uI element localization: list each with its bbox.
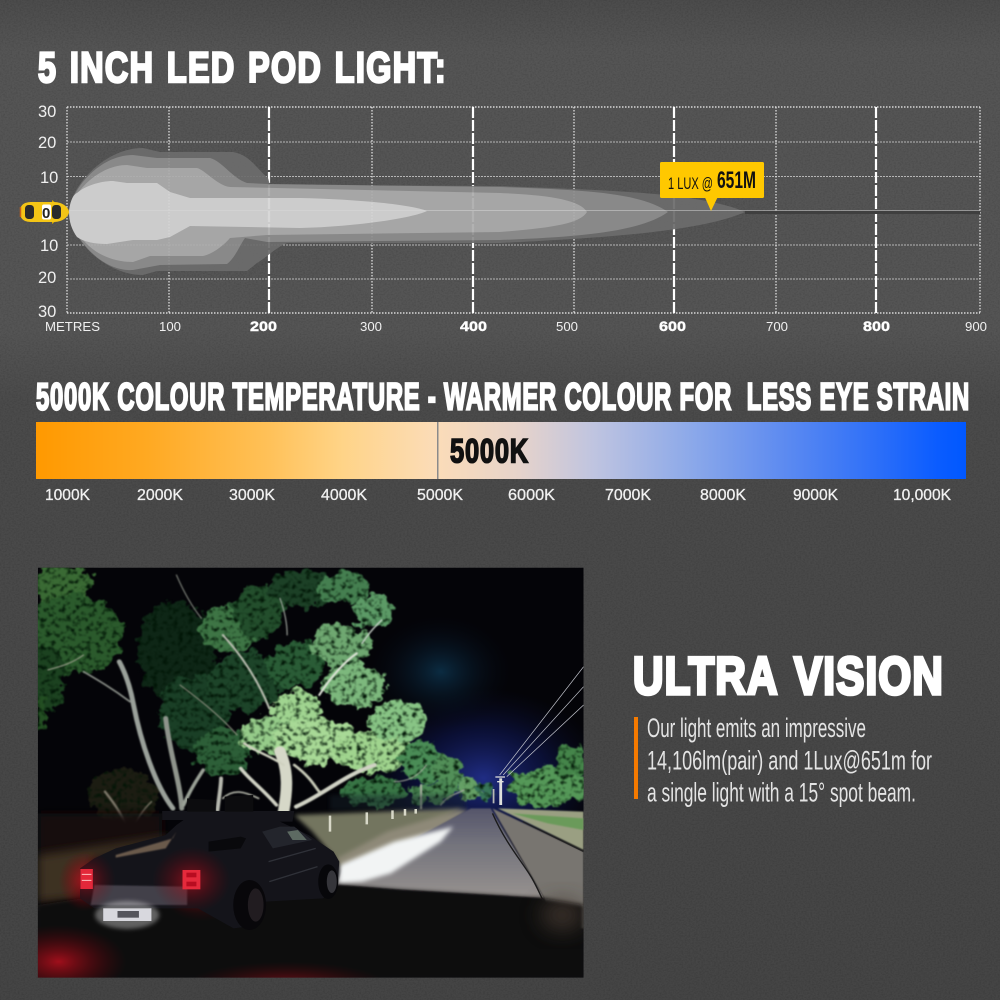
vertical axis labels [38, 103, 58, 321]
pickup truck [80, 795, 339, 930]
vertical axis labels: 30 [38, 303, 56, 321]
beam distance chart [20, 103, 987, 334]
description text: Our light emits an impressive [647, 713, 866, 743]
title: 5 INCH LED POD LIGHT: [38, 44, 447, 92]
orange accent bar [634, 717, 638, 799]
road surface [337, 808, 544, 898]
lit number plate [95, 901, 159, 929]
dark back foliage [23, 565, 392, 822]
callout: 1 lux at 651 m: 1 LUX @ [668, 174, 713, 193]
roadside trees on the right [509, 745, 587, 807]
horizontal axis labels: 200 [250, 319, 277, 334]
5000K marker line [437, 422, 438, 479]
bright lit tree canopy [239, 623, 492, 807]
red tail lights [66, 851, 226, 908]
scale labels: 9000K [793, 487, 838, 504]
icon: yellow car [20, 200, 69, 224]
icon: yellow car: 0 [42, 205, 50, 222]
callout: 1 lux at 651 m: 651M [717, 167, 756, 194]
bright headlight wash on road [339, 827, 453, 883]
horizontal axis labels: 600 [659, 319, 686, 334]
horizontal axis labels: 300 [360, 320, 382, 334]
colour temperature scale [36, 422, 966, 504]
vertical axis labels: 10 [40, 237, 58, 255]
light beam pattern [69, 148, 745, 275]
scale labels: 10,000K [893, 487, 951, 504]
text block: ultra vision description [634, 713, 932, 808]
grid lines [67, 107, 980, 313]
scale labels: 8000K [700, 487, 746, 504]
fence posts [330, 809, 416, 832]
distant dark tree bases [330, 795, 466, 810]
vertical axis labels: 20 [38, 134, 56, 152]
scale labels [45, 487, 951, 504]
scale labels: 1000K [45, 487, 90, 504]
horizontal axis labels [45, 319, 987, 334]
scale labels: 2000K [137, 487, 183, 504]
description text [647, 713, 932, 808]
horizontal axis labels: 100 [159, 320, 181, 334]
5000K marker label: 5000K [450, 432, 529, 470]
foreground dark road [38, 885, 584, 978]
scale labels: 3000K [229, 487, 275, 504]
left field [38, 806, 164, 904]
horizontal axis labels: METRES [45, 320, 100, 334]
callout: 1 lux at 651 m [660, 162, 764, 211]
gradient bar [36, 422, 966, 479]
right road shoulder [492, 808, 584, 928]
vertical axis labels: 10 [40, 169, 58, 187]
beam centre lines [69, 210, 980, 212]
scale labels: 6000K [508, 487, 555, 504]
scale labels: 7000K [605, 487, 651, 504]
horizontal axis labels: 700 [766, 320, 788, 334]
photo: truck on night road lit by pod lights [38, 568, 584, 978]
white gum tree trunks and branches [48, 575, 464, 837]
vertical axis labels: 20 [38, 269, 56, 287]
vertical axis labels: 30 [38, 103, 56, 121]
utility pole and wires [494, 667, 584, 805]
horizontal axis labels: 900 [965, 320, 987, 334]
scale labels: 4000K [321, 487, 367, 504]
red glow on ground [38, 928, 120, 978]
horizontal axis labels: 500 [556, 320, 578, 334]
horizontal axis labels: 800 [863, 319, 890, 334]
scale labels: 5000K [417, 487, 463, 504]
grass verge [294, 808, 462, 865]
horizontal axis labels: 400 [460, 319, 487, 334]
